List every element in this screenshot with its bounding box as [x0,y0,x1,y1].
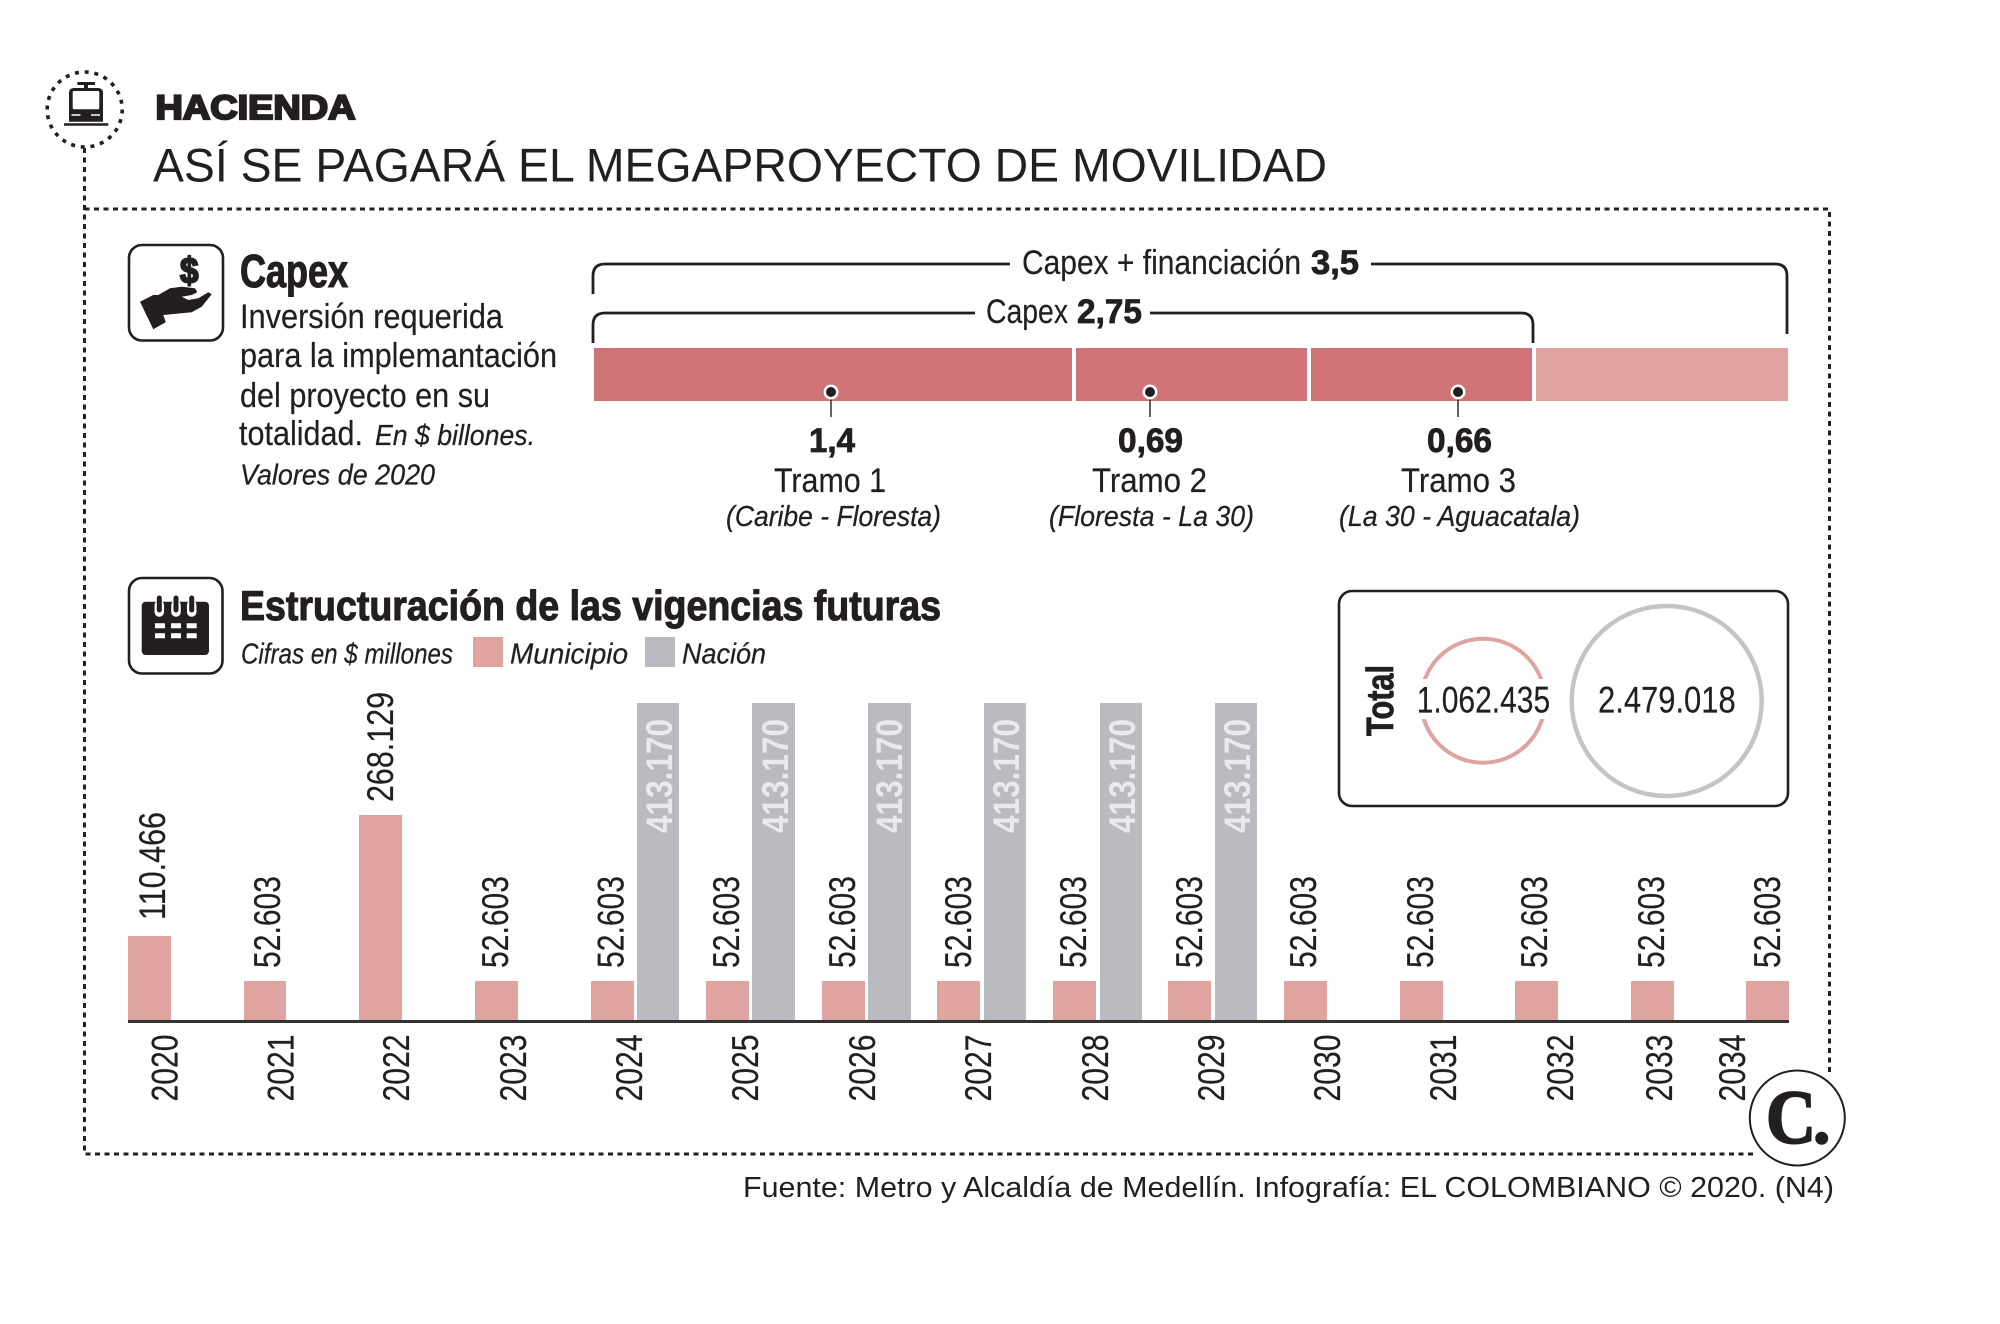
nacion values [639,719,1258,833]
year labels: 2023 [493,1034,534,1102]
label: tramo 1: Tramo 1 [774,462,886,500]
circle: nacion total: 2.479.018 [1598,680,1736,720]
municipio values: 52.603 [1283,876,1324,968]
legend: Municipio [510,638,628,670]
year labels: 2021 [260,1034,301,1102]
year labels [144,1034,1753,1102]
logo: El Colombiano [1750,1070,1845,1166]
municipio values: 52.603 [247,876,288,968]
year labels: 2024 [609,1034,650,1102]
label: tramo 2: 0,69 [1118,422,1183,460]
municipio values: 52.603 [1053,876,1094,968]
label: tramo 2 [1049,422,1254,533]
label: tramo 2: Tramo 2 [1092,462,1207,500]
municipio values: 52.603 [1514,876,1555,968]
municipio values: 52.603 [590,876,632,968]
year labels: 2031 [1423,1034,1464,1102]
nacion values: 413.170 [869,719,910,833]
year labels: 2033 [1639,1034,1680,1102]
municipio values: 52.603 [822,876,863,968]
panel: total: Total [1360,665,1402,736]
panel: capex description: totalidad. [239,415,363,453]
year labels: 2029 [1191,1034,1232,1102]
logo: El Colombiano: C [1766,1076,1816,1160]
circle: municipio total [1410,639,1556,763]
legend [241,637,766,670]
panel: capex description: Capex [240,245,348,297]
municipio values: 52.603 [1747,876,1788,968]
bracket: capex + financing: 3,5 [1311,244,1359,282]
axis [128,1020,1789,1023]
bracket: capex: 2,75 [1077,293,1142,331]
municipio values: 52.603 [706,876,747,968]
year labels: 2020 [144,1034,185,1102]
municipio values: 268.129 [360,692,401,802]
source line: Fuente: Metro y Alcaldía de Medellín. Infografía: EL COLOMBIANO © 2020. (N4) [743,1172,1834,1204]
municipio values: 110.466 [132,812,173,920]
label: tramo 2: (Floresta - La 30) [1049,501,1254,533]
panel: capex description: En $ billones. [375,420,535,452]
panel: total [1339,591,1788,806]
stacked bar: tramos [594,348,1788,417]
label: tramo 1: 1,4 [809,422,855,460]
municipio values: 52.603 [475,876,516,968]
panel: capex description: del proyecto en su [240,377,490,415]
circle: nacion total [1572,606,1762,796]
municipio values: 52.603 [938,876,979,968]
nacion values: 413.170 [986,719,1027,833]
year labels: 2027 [958,1034,999,1102]
municipio values: 52.603 [1400,876,1441,968]
heading: vigencias futuras: Estructuración de las vigencias futuras [240,582,941,629]
bar chart: vigencias futuras [128,692,1789,1102]
bracket: capex + financing: Capex + financiación [1022,244,1301,282]
nacion values: 413.170 [1217,719,1258,833]
municipio values: 52.603 [1631,876,1672,968]
nacion values: 413.170 [1102,719,1143,833]
year labels: 2028 [1075,1034,1116,1102]
nacion bars [637,703,1257,1021]
icon: hand holding dollar: $ [180,250,198,291]
year labels: 2030 [1307,1034,1348,1102]
icon: train in dotted circle [47,72,122,147]
year labels: 2022 [376,1034,417,1102]
icon: calendar [129,578,222,674]
nacion values: 413.170 [755,719,796,833]
icon: hand holding dollar [129,245,223,340]
section label: HACIENDA [156,89,356,127]
year labels: 2034 [1712,1034,1753,1102]
municipio values [132,692,1788,968]
bracket: capex: Capex [986,293,1068,331]
legend: Nación [682,638,766,670]
municipio bars [128,815,1789,1021]
label: tramo 3 [1339,422,1580,533]
bracket: capex [593,293,1533,343]
panel: capex description: Inversión requerida [240,298,503,336]
year labels: 2026 [842,1034,883,1102]
title: ASÍ SE PAGARÁ EL MEGAPROYECTO DE MOVILIDAD [153,138,1327,192]
year labels: 2032 [1540,1034,1581,1102]
bracket: capex + financing [593,244,1787,334]
legend: Cifras en $ millones [241,638,453,670]
label: tramo 3: Tramo 3 [1401,462,1516,500]
year labels: 2025 [725,1034,766,1102]
nacion values: 413.170 [639,719,680,833]
panel: capex description [239,245,557,492]
label: tramo 3: 0,66 [1427,422,1492,460]
label: tramo 1: (Caribe - Floresta) [726,501,941,533]
circle: municipio total: 1.062.435 [1417,680,1550,720]
label: tramo 1 [726,422,941,533]
panel: capex description: para la implemantación [240,337,557,375]
label: tramo 3: (La 30 - Aguacatala) [1339,501,1580,533]
municipio values: 52.603 [1169,876,1210,968]
panel: capex description: Valores de 2020 [240,460,435,492]
